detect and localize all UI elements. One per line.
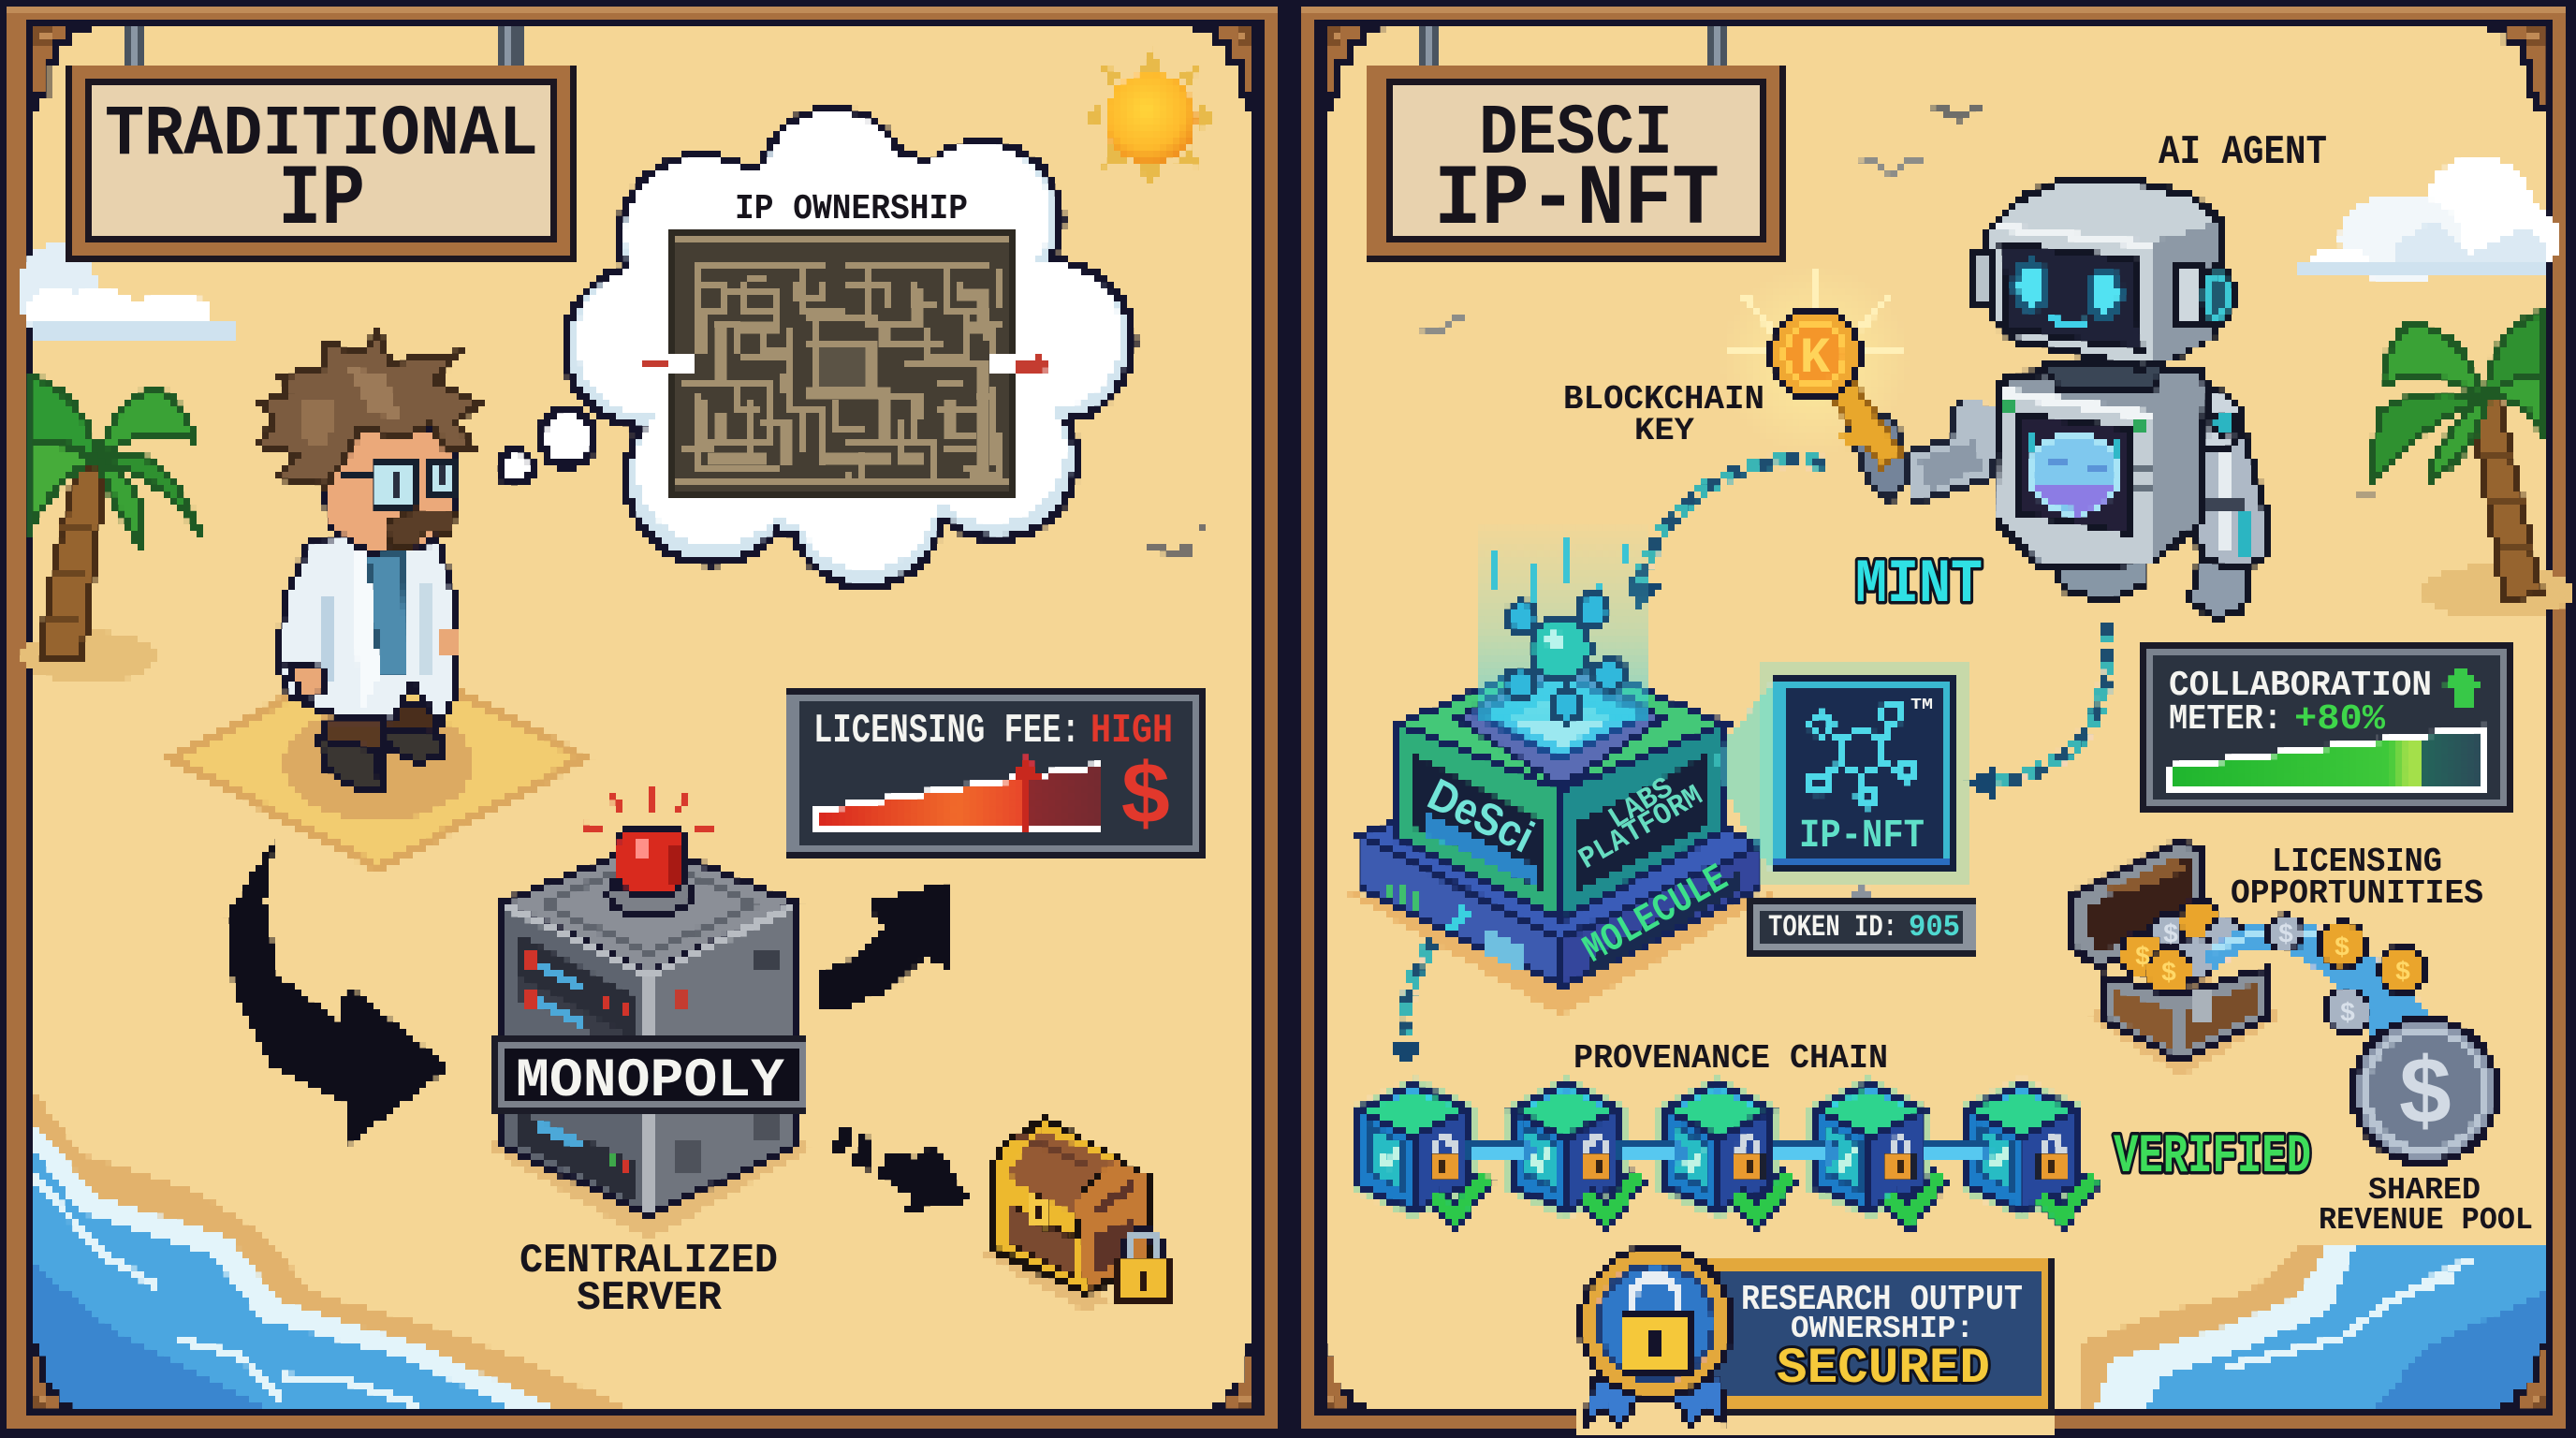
molecule [1504,594,1625,722]
chain links [1468,1140,1995,1165]
label: mint: MINT [1855,550,1983,620]
seagulls [1142,524,1205,557]
DeSci labs platform [1340,523,1783,1016]
label: collaboration meter [2169,666,2432,740]
label: research output ownership secured: RESEARCH OUTPUT [1741,1280,2023,1320]
cloud [2294,156,2560,284]
scientist [258,332,480,788]
label: coin symbols: $ [2278,921,2293,950]
heading: DeSci IP-NFT: DESCI [1479,94,1673,174]
label: verified: VERIFIED [2114,1127,2311,1188]
dashed arrow: robot to IP-NFT [1966,622,2107,801]
label: shared revenue pool: REVENUE POOL [2319,1203,2533,1238]
traditional panel artwork [0,0,1288,1438]
locked treasure chest [976,1119,1170,1311]
block 5 [1960,1077,2095,1219]
palm tree [2372,312,2574,619]
flowing coins [2268,916,2426,1034]
heading: traditional IP: TRADITIONAL [105,95,538,175]
isometric sand tile [172,651,585,868]
label: coin symbols [2135,921,2410,1029]
label: dollar sign on revenue coin: $ [2397,1045,2453,1151]
ocean [2081,1246,2544,1406]
token ID tag [1747,880,1978,955]
block 4 [1808,1077,1942,1219]
label: token ID: TOKEN ID: [1768,910,1897,945]
block 1 [1352,1077,1486,1219]
panel: DeSci IP-NFT [1288,0,2576,1438]
label: research output ownership secured: SECURED [1777,1341,1990,1398]
label: licensing opportunities: LICENSING [2272,843,2442,881]
label: IP ownership: IP OWNERSHIP [735,189,968,229]
heading: traditional IP [105,95,538,249]
label: coin symbols: $ [2163,921,2178,950]
research output secured banner [1690,1255,2056,1413]
IP-NFT token card [1713,663,1968,884]
licensing fee panel [783,688,1204,858]
ocean [33,1091,624,1406]
label: centralized server: CENTRALIZED [520,1238,778,1284]
sign board [1364,27,1785,259]
label: key letter: K [1800,330,1831,388]
AI agent robot [1973,178,2265,618]
label: labs platform: LABS [1603,770,1679,836]
coins in chest [2120,901,2243,994]
block 2 [1504,1077,1639,1219]
arrow: server to licensing fee [817,880,953,1008]
label: token ID: 905 [1909,910,1960,945]
label: licensing fee high: HIGH [1090,708,1173,755]
collaboration meter panel [2141,642,2512,813]
block 3 [1656,1077,1791,1219]
label: centralized server [520,1238,778,1322]
provenance chain [1352,1077,2095,1219]
maze [645,231,1052,499]
label: coin symbols: $ [2340,1000,2355,1029]
label: shared revenue pool [2319,1173,2533,1238]
label: collaboration meter: METER: [2169,699,2282,740]
medal [1577,1244,1734,1427]
open treasure chest [2069,841,2284,1077]
heading: traditional IP: IP [278,151,365,249]
label: licensing fee high: $ [1120,750,1172,848]
label: labs platform: PLATFORM [1573,779,1708,877]
blockchain key [1770,309,1902,466]
centralized server [483,828,816,1240]
wooden frame [9,5,1279,1431]
arrow: scientist to server [226,837,450,1148]
label: research output ownership secured: OWNERSHIP: [1791,1312,1974,1346]
red alert rays [585,787,714,835]
thought cloud [561,105,1137,591]
panel: traditional IP [0,0,1288,1438]
label: licensing opportunities: OPPORTUNITIES [2231,874,2483,913]
cloud [19,243,234,341]
monopoly banner [490,1035,809,1116]
label: molecule: MOLECULE [1576,856,1735,973]
heading: DeSci IP-NFT: IP-NFT [1434,151,1720,249]
label: licensing opportunities [2231,843,2483,913]
sand background [33,27,1253,1406]
sign board [66,27,578,259]
label: AI agent: AI AGENT [2159,129,2327,176]
label: coin symbols: $ [2161,960,2176,989]
frame corners [31,25,1255,1408]
thought bubbles [499,410,593,484]
revenue stream [2204,920,2434,1053]
dashed arrow: platform to chain [1386,906,1471,1067]
label: licensing fee high: LICENSING FEE: [813,708,1080,755]
label: blockchain key: KEY [1634,414,1695,449]
label: coin symbols: $ [2334,934,2349,963]
label: research output ownership secured [1741,1280,2023,1398]
label: IP-NFT: IP-NFT [1799,813,1925,858]
frame corners [1323,25,2546,1408]
sun [1084,49,1215,185]
label: centralized server: SERVER [577,1275,723,1322]
label: trademark: TM [1910,697,1933,714]
label: DeSci on platform: DeSci [1420,770,1541,863]
label: blockchain key [1563,380,1764,449]
shared revenue coin [2353,1019,2497,1163]
DeSci panel artwork [1288,0,2576,1438]
label: collaboration meter: COLLABORATION [2169,666,2432,706]
label: coin symbols: $ [2395,959,2410,988]
label: blockchain key: BLOCKCHAIN [1563,380,1764,418]
label: collaboration meter: +80% [2294,699,2385,740]
dashed arrow: key to platform [1625,461,1826,610]
sand background [1325,27,2544,1406]
label: shared revenue pool: SHARED [2368,1173,2481,1208]
robot left arm [1849,403,1983,501]
label: licensing fee high [813,708,1173,848]
seagulls [1419,103,2377,498]
arrow: server to locked chest [833,1127,971,1213]
label: provenance chain: PROVENANCE CHAIN [1573,1039,1888,1078]
robot right arm [2182,391,2265,618]
hologram beam [1477,523,1646,719]
robot head [1973,178,2234,368]
wooden frame [1300,5,2565,1431]
palm tree [22,376,201,683]
key glow [1721,267,1909,454]
heading: DeSci IP-NFT [1434,94,1720,249]
label: coin symbols: $ [2135,944,2150,973]
label: monopoly: MONOPOLY [516,1051,784,1112]
